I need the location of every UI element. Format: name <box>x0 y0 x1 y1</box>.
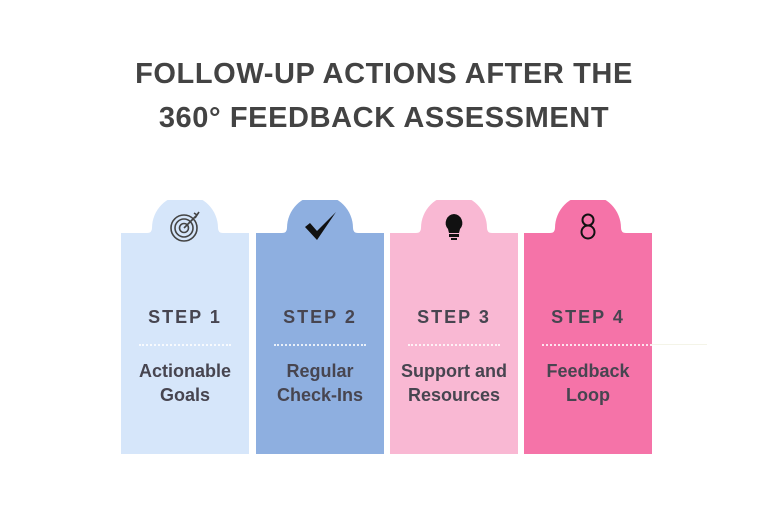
text: Actionable Goals <box>139 361 231 405</box>
step label: STEP 1 <box>148 307 222 327</box>
icon: target <box>170 212 200 242</box>
text: Actionable Goals: Goals <box>160 385 210 405</box>
panel: step 1 <box>121 200 249 454</box>
text: Regular Check-Ins: Check-Ins <box>277 385 363 405</box>
text: Support and Resources: Resources <box>408 385 500 405</box>
text: Feedback Loop: Loop <box>566 385 610 405</box>
step label: STEP 4 <box>551 307 625 327</box>
panel: step 2 <box>256 200 384 454</box>
panel: step 4 <box>524 200 652 454</box>
title: FOLLOW-UP ACTIONS AFTER THE <box>135 58 633 90</box>
text: Feedback Loop <box>546 361 630 405</box>
icon: infinity loop <box>580 214 596 240</box>
text: Support and Resources: Support and <box>401 361 507 381</box>
title <box>135 58 633 134</box>
icon: lightbulb <box>446 214 462 240</box>
text: Actionable Goals: Actionable <box>139 361 231 381</box>
panel: step 3 <box>390 200 518 454</box>
text: Feedback Loop: Feedback <box>546 361 630 381</box>
step label: STEP 2 <box>283 307 357 327</box>
title: 360° FEEDBACK ASSESSMENT <box>159 102 609 134</box>
text: Support and Resources <box>401 361 507 405</box>
step label: STEP 3 <box>417 307 491 327</box>
text: Regular Check-Ins <box>277 361 363 405</box>
text: Regular Check-Ins: Regular <box>286 361 354 381</box>
icon: check <box>305 212 336 240</box>
